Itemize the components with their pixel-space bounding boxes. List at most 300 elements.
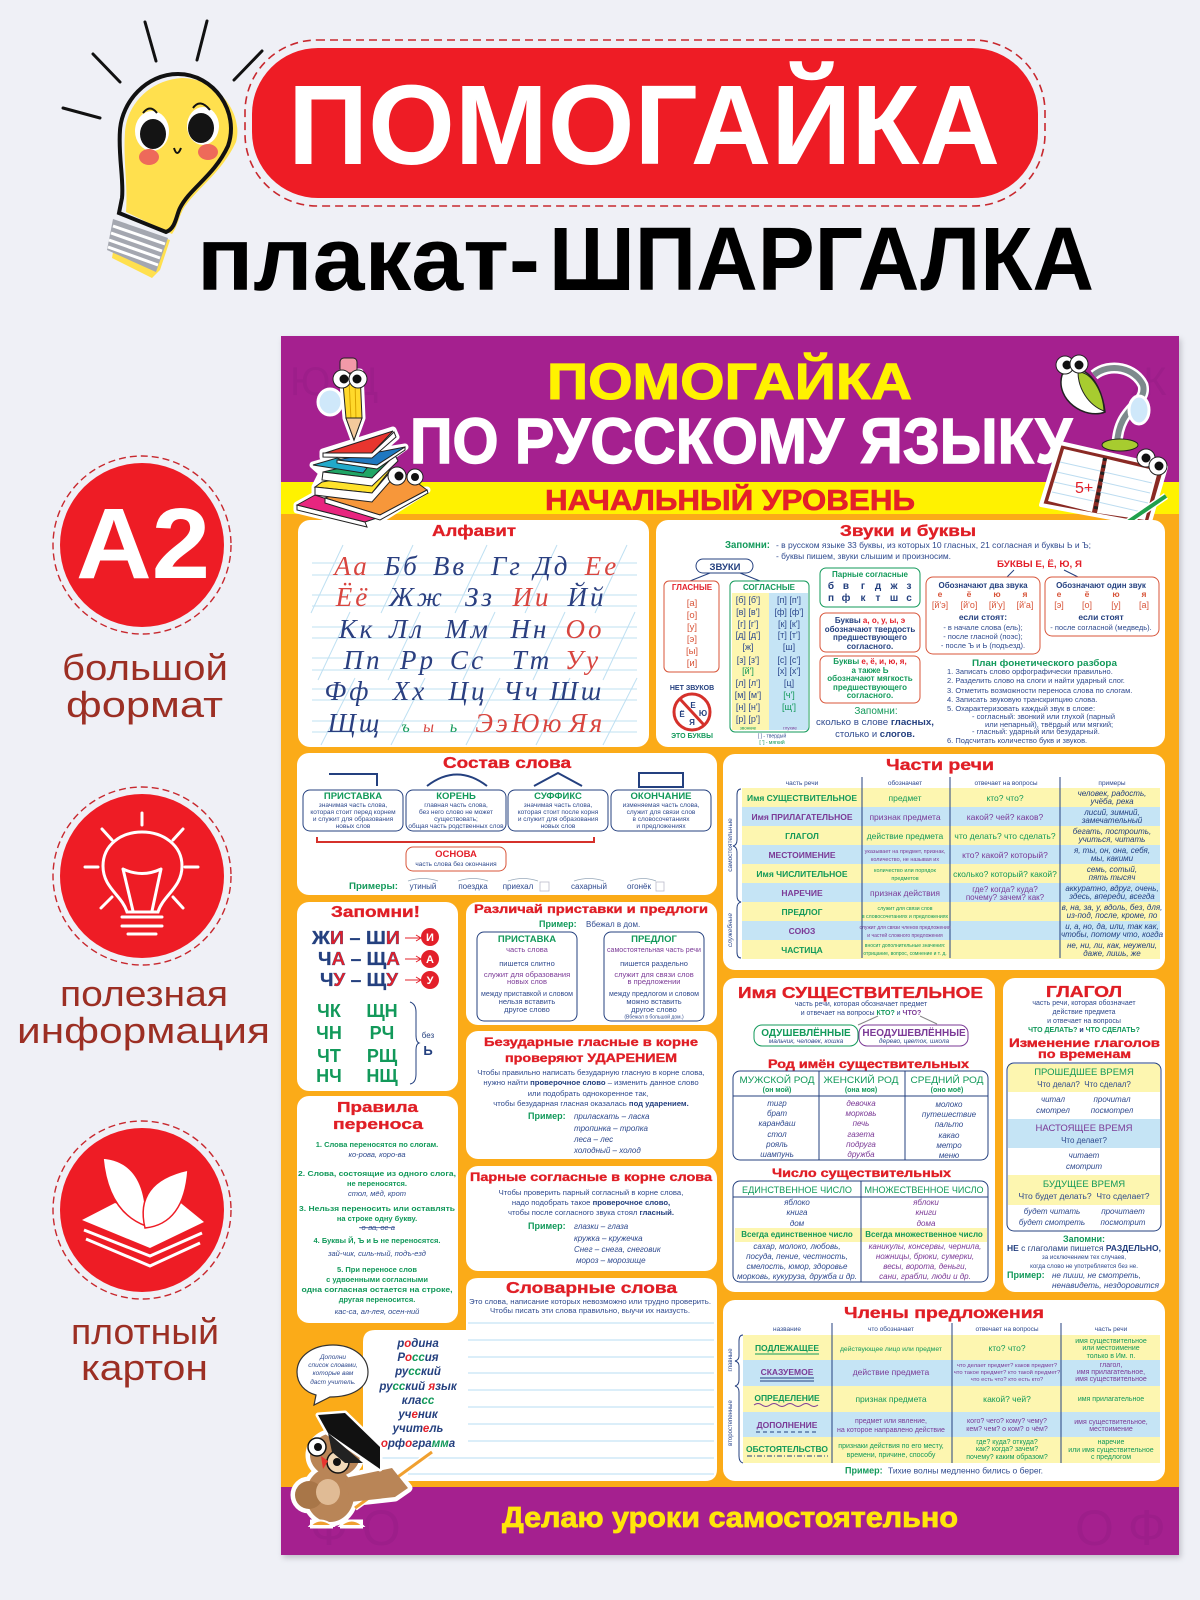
member parts of speech: имя прилагательное	[1078, 1396, 1144, 1403]
panel: verb: ГЛАГОЛ	[1046, 984, 1122, 1001]
illustration: owl with speech bubble	[295, 1345, 432, 1526]
member questions: что есть что? кто есть кто?	[971, 1377, 1044, 1383]
letter pairs without soft sign: ЧК	[317, 1001, 342, 1021]
tenses table: Что будет делать? Что сделает?	[1018, 1192, 1150, 1201]
panel: hyphenation rules: 1. Слова переносятся по слогам.	[316, 1140, 438, 1149]
member questions: кого? чего? кому? чему?	[967, 1418, 1047, 1425]
sound tree: глухие	[783, 726, 797, 730]
examples: утиный	[410, 882, 436, 891]
gender table: ЖЕНСКИЙ РОД	[824, 1074, 899, 1086]
sound tree: звонкие	[740, 726, 757, 730]
green book	[323, 455, 395, 478]
phonetic analysis plan: или непарный), твёрдый или мягкий;	[985, 720, 1113, 729]
animate and inanimate: НЕОДУШЕВЛЁННЫЕ	[862, 1026, 966, 1039]
gender table: морковь	[846, 1109, 876, 1118]
gender table: тигр	[767, 1099, 787, 1108]
number table	[733, 1181, 988, 1282]
panel: sentence members: часть речи	[1095, 1326, 1128, 1333]
member names: ОПРЕДЕЛЕНИЕ	[754, 1393, 820, 1403]
letters е ё ю я: если стоят:	[959, 612, 1007, 622]
examples: Примеры:	[349, 881, 398, 892]
panel: hyphenation rules: с удвоенными согласными	[326, 1275, 428, 1284]
letters е ё ю я: - после согласной (медведь).	[1050, 623, 1152, 632]
questions: какой? чей? каков?	[967, 812, 1043, 822]
panel: unstressed vowels: чтобы безударная гласная оказалась под ударением.	[493, 1099, 689, 1108]
panel: sentence members: Члены предложения	[844, 1305, 1044, 1322]
hard and soft rules: обозначают твердость	[825, 625, 915, 634]
panel: alphabet: Дд	[531, 551, 570, 581]
side labels	[726, 789, 741, 958]
meanings: признак действия	[870, 888, 940, 898]
number table: дом	[790, 1219, 805, 1228]
part of speech names: МЕСТОИМЕНИЕ	[768, 850, 836, 860]
phonetic analysis plan: 3. Отметить возможности переноса слова по слогам.	[947, 686, 1132, 695]
word list: Россия	[397, 1352, 439, 1364]
panel: hyphenation rules	[297, 1096, 458, 1323]
paired consonants: т	[876, 593, 881, 604]
panel: unstressed vowels: леса – лес	[573, 1135, 613, 1144]
sound tree: [в] [в']	[736, 607, 760, 617]
number table: ножницы, брюки, сумерки,	[876, 1252, 974, 1261]
letters е ё ю я: [э]	[1054, 600, 1064, 610]
letters е ё ю я: - после Ъ и Ь (подъезд).	[941, 641, 1025, 650]
examples: я, ты, он, она, себя,	[1073, 846, 1150, 855]
meanings: служит для связи членов предложения	[859, 925, 951, 931]
panel: alphabet: Сс	[450, 645, 486, 675]
meanings: указывает на предмет, признак,	[865, 849, 946, 855]
member parts of speech: имя прилагательное,	[1077, 1369, 1145, 1376]
examples: семь, сотый,	[1087, 865, 1137, 874]
gender table: путешествие	[922, 1110, 977, 1119]
examples: здесь, впереди, всегда	[1068, 892, 1155, 901]
sound tree: [и]	[687, 658, 697, 669]
member questions: как? когда? зачем?	[976, 1446, 1038, 1453]
badge: A2 большой формат	[53, 456, 231, 725]
tenses table: будет смотреть	[1019, 1218, 1085, 1227]
panel: verb	[1003, 978, 1165, 1292]
tenses table: ПРОШЕДШЕЕ ВРЕМЯ	[1034, 1067, 1134, 1078]
hard and soft rules: предшествующего	[833, 633, 907, 642]
gender table: рояль	[765, 1140, 788, 1149]
member questions: что делает предмет? каков предмет?	[957, 1363, 1058, 1369]
panel: alphabet: Оо	[566, 614, 604, 644]
letters е ё ю я: [й'а]	[1017, 600, 1033, 610]
zhi-shi rules	[311, 928, 439, 990]
panel: word structure: общая часть родственных слов	[408, 822, 504, 830]
illustration: pencil on book stack	[297, 358, 428, 527]
panel: alphabet: Ээ	[475, 708, 511, 738]
examples: не, ни, ли, как, неужели,	[1067, 941, 1157, 950]
panel: alphabet: Алфавит	[432, 523, 516, 540]
badge: A2 большой формат: A2	[76, 488, 210, 600]
letters е ё ю я: [у]	[1111, 600, 1121, 610]
panel: paired consonants in root	[466, 1166, 717, 1271]
panel: noun: Имя СУЩЕСТВИТЕЛЬНОЕ	[738, 985, 983, 1002]
phonetic analysis plan: 4. Записать звуковую транскрипцию слова.	[947, 695, 1097, 704]
panel: verb: по временам	[1038, 1049, 1131, 1061]
examples: замечательный	[1081, 816, 1143, 825]
poster title: ПОМОГАЙКА	[547, 352, 912, 410]
tenses table: читает	[1069, 1151, 1100, 1160]
member names: ДОПОЛНЕНИЕ	[757, 1420, 818, 1430]
panel: word structure: без него слово не может	[419, 808, 493, 816]
panel: sounds and letters: - в русском языке 33 буквы, из которых 10 гласных, 21 согласная и буквы Ь и Ъ;	[776, 541, 1091, 550]
subtitle: плакат-ШПАРГАЛКА: плакат-	[197, 210, 540, 310]
badge: плотный картон: плотный	[71, 1311, 219, 1352]
hard and soft rules: согласного.	[847, 642, 893, 651]
panel: word structure: новых слов	[541, 823, 576, 830]
subtitle: плакат-ШПАРГАЛКА	[197, 210, 1094, 310]
verb note: ненавидеть, нездоровится	[1052, 1281, 1160, 1290]
sticker outline	[295, 1433, 408, 1524]
panel: prefixes and prepositions: другое слово	[504, 1005, 550, 1014]
panel: word structure: существовать;	[434, 816, 478, 823]
panel: hyphenation rules: 5. При переносе слов	[337, 1265, 417, 1274]
part of speech names: Имя ЧИСЛИТЕЛЬНОЕ	[756, 869, 848, 879]
panel: hyphenation rules: зай-чик, силь-ный, подъ-езд	[327, 1249, 426, 1258]
examples: поездка	[458, 882, 488, 891]
word list	[378, 1338, 458, 1450]
tenses table: Что делал? Что сделал?	[1037, 1080, 1131, 1089]
panel: word structure: ПРИСТАВКА	[324, 791, 382, 802]
zhi-shi rules: ЧА – ЩА	[318, 949, 400, 969]
sound tree: [ ] - твердый	[758, 732, 786, 740]
member parts of speech: или местоимение	[1082, 1345, 1140, 1352]
member meanings: на которое направлено действие	[837, 1426, 945, 1434]
letters е ё ю я: Обозначают один звук	[1056, 581, 1147, 590]
sound tree: [р] [р']	[736, 714, 760, 724]
letters е ё ю я: [й'о]	[961, 600, 977, 610]
panel: dictionary words: Словарные слова	[506, 1280, 677, 1297]
side labels: служебные	[726, 913, 734, 947]
poster title	[410, 352, 1073, 517]
gender table: СРЕДНИЙ РОД	[910, 1074, 984, 1086]
panel: dictionary words: Чтобы писать эти слова правильно, выучи их наизусть.	[490, 1306, 690, 1315]
tenses table: НАСТОЯЩЕЕ ВРЕМЯ	[1036, 1123, 1133, 1134]
no-sound sign: Е	[690, 701, 696, 710]
number table: ЕДИНСТВЕННОЕ ЧИСЛО	[742, 1185, 852, 1195]
side labels: самостоятельные	[727, 818, 734, 872]
meanings: признак предмета	[869, 812, 941, 822]
member meanings: признаки действия по его месту,	[838, 1442, 944, 1450]
panel: verb: ЧТО ДЕЛАТЬ? и ЧТО СДЕЛАТЬ?	[1028, 1027, 1140, 1034]
letters е ё ю я: я	[1142, 589, 1147, 599]
title pill: ПОМОГАЙКА	[245, 40, 1045, 206]
gender table: карандаш	[758, 1119, 796, 1128]
illustration: owl with speech bubble: даст учитель.	[310, 1378, 356, 1386]
number table: каникулы, консервы, чернила,	[869, 1242, 981, 1251]
pink book	[297, 505, 367, 527]
letter pairs without soft sign: без	[422, 1031, 435, 1040]
panel: prefixes and prepositions: пишется раздельно	[620, 959, 688, 968]
subtitle: плакат-ШПАРГАЛКА: ШПАРГАЛКА	[549, 210, 1094, 310]
sound tree: ЗВУКИ	[710, 562, 741, 573]
panel: prefixes and prepositions: между приставкой и словом	[481, 989, 573, 998]
panel: word structure: СУФФИКС	[534, 791, 582, 802]
member parts of speech	[1068, 1338, 1154, 1461]
panel: sounds and letters	[656, 520, 1165, 747]
gender table: газета	[847, 1130, 875, 1139]
badge: плотный картон	[53, 1121, 231, 1388]
sound tree: [а]	[687, 598, 697, 609]
side labels	[728, 1335, 743, 1463]
meanings: количество или порядок	[874, 868, 937, 874]
panel: noun: Род имён существительных	[768, 1057, 969, 1071]
panel: alphabet: Зз	[465, 582, 495, 612]
panel: alphabet: Лл	[388, 614, 425, 644]
number table: МНОЖЕСТВЕННОЕ ЧИСЛО	[864, 1185, 984, 1195]
panel: hyphenation rules: 4. Буквы Й, Ъ и Ь не переносятся.	[314, 1236, 440, 1245]
examples: чтобы, потому что, когда	[1061, 930, 1164, 939]
panel: parts of speech: часть речи	[786, 780, 819, 787]
examples: аккуратно, вдруг, очень,	[1065, 884, 1159, 893]
badge: плотный картон: картон	[81, 1347, 208, 1388]
letters е ё ю я: [й'у]	[989, 600, 1005, 610]
verb note	[1007, 1234, 1161, 1290]
panel: word structure: часть слова без окончания	[415, 860, 497, 868]
hard and soft rules	[816, 613, 934, 740]
examples: из-под, после, кроме, по	[1067, 911, 1158, 920]
letters е ё ю я: е	[1057, 589, 1062, 599]
poster background: Ж	[1130, 360, 1167, 404]
gender table	[733, 1071, 988, 1160]
panel: prefixes and prepositions: ПРЕДЛОГ	[631, 934, 677, 945]
gender table: (оно моё)	[931, 1087, 963, 1094]
letters е ё ю я: ю	[1112, 589, 1120, 599]
questions: почему? зачем? как?	[966, 893, 1045, 902]
panel: sounds and letters: - буквы пишем, звуки слышим и произносим.	[776, 552, 951, 561]
zhi-shi rules: У	[427, 975, 434, 987]
no-sound sign: Ё	[679, 710, 685, 719]
tenses table: прочитает	[1101, 1207, 1145, 1216]
sound tree: [о]	[687, 610, 697, 621]
panel: parts of speech: примеры	[1098, 780, 1126, 787]
letters е ё ю я: если стоят	[1078, 612, 1124, 622]
sound tree: [к] [к']	[778, 619, 800, 629]
member names: ОБСТОЯТЕЛЬСТВО	[746, 1444, 828, 1454]
sound tree: ГЛАСНЫЕ	[672, 583, 713, 592]
panel: paired consonants in root: надо подобрать такое проверочное слово,	[512, 1198, 670, 1207]
panel: alphabet: Шш	[549, 676, 604, 706]
illustration: owl with speech bubble: список словами,	[308, 1362, 358, 1369]
panel: word structure: которая стоит перед корнем	[310, 809, 396, 816]
panel: noun: часть речи, которая обозначает предмет	[795, 1000, 928, 1008]
gender table: МУЖСКОЙ РОД	[740, 1074, 815, 1086]
panel: unstressed vowels: Чтобы правильно написать безударную гласную в корне слова,	[477, 1068, 705, 1077]
member parts of speech: с предлогом	[1091, 1454, 1131, 1461]
panel: hyphenation rules: 3. Нельзя переносить или оставлять	[299, 1204, 455, 1213]
number table: книга	[787, 1208, 808, 1217]
panel: word structure: в словосочетаниях	[632, 816, 690, 823]
illustration: lamp and notebook	[1041, 355, 1167, 526]
zhi-shi rules: И	[426, 932, 434, 944]
panel: prefixes and prepositions: пишется слитно	[499, 959, 555, 968]
panel: alphabet: Уу	[565, 645, 601, 675]
panel: prefixes and prepositions: в предложении	[628, 977, 680, 986]
gender table: пальто	[935, 1120, 964, 1129]
panel: hyphenation rules: кас-са, ал-лея, осен-ний	[335, 1307, 420, 1316]
word list: русский язык	[378, 1381, 458, 1393]
panel: alphabet: ь	[450, 719, 460, 736]
panel: prefixes and prepositions	[466, 902, 717, 1025]
gender table: меню	[939, 1151, 959, 1160]
paired consonants: к	[860, 593, 866, 604]
sound tree: [л] [л']	[736, 678, 760, 688]
sound tree: [ '] - мягкий	[759, 739, 785, 746]
panel: unstressed vowels: или подобрать однокоренное так,	[528, 1089, 648, 1098]
letters е ё ю я: е	[938, 589, 943, 599]
panel: word structure: Состав слова	[443, 755, 571, 772]
panel: alphabet: Фф	[325, 676, 371, 706]
panel: unstressed vowels	[466, 1031, 717, 1159]
sound tree: [с] [с']	[777, 655, 801, 665]
meanings: отрицание, вопрос, сомнение и т. д.	[863, 951, 947, 957]
tenses table: будет читать	[1024, 1207, 1080, 1216]
panel: word structure: которая стоит после корня	[518, 809, 599, 816]
phonetic analysis plan: - гласный: ударный или безударный.	[972, 727, 1100, 736]
number table: яблоки	[912, 1198, 939, 1207]
hard and soft rules: а также Ь	[851, 666, 889, 675]
panel: alphabet: Ии	[512, 582, 552, 612]
no-sound sign: НЕТ ЗВУКОВ	[670, 685, 714, 692]
questions: где? когда? куда?	[972, 885, 1038, 894]
phonetic analysis plan: - согласный: звонкий или глухой (парный	[972, 712, 1115, 721]
member questions: что такое предмет? кто такой предмет?	[954, 1369, 1061, 1376]
icon: smiling light bulb	[63, 21, 262, 278]
panel: noun	[723, 978, 995, 1292]
meanings: служит для связи слов	[878, 906, 933, 912]
phonetic analysis plan: 6. Подсчитать количество букв и звуков.	[947, 736, 1087, 745]
blue books	[313, 458, 367, 473]
member meanings	[837, 1345, 945, 1459]
questions: сколько? который? какой?	[953, 869, 1057, 879]
panel: verb: часть речи, которая обозначает	[1032, 999, 1136, 1007]
panel: alphabet: Цц	[448, 676, 488, 706]
animate and inanimate	[754, 1025, 968, 1046]
letters е ё ю я: ю	[993, 589, 1001, 599]
tenses table: прочитал	[1094, 1095, 1131, 1104]
examples: приехал	[503, 882, 534, 891]
examples: и, а, но, да, или, так как,	[1065, 922, 1159, 931]
red book	[325, 431, 393, 453]
sound tree: [н] [н']	[736, 702, 760, 712]
poster background: О Ф	[1075, 1500, 1166, 1556]
letters е ё ю я: [о]	[1082, 600, 1092, 610]
meanings: действие предмета	[867, 831, 944, 841]
panel: alphabet	[298, 520, 649, 747]
panel: verb: и отвечает на вопросы	[1047, 1018, 1121, 1025]
sound tree	[664, 559, 809, 746]
letters е ё ю я: ё	[1085, 589, 1090, 599]
gender table: метро	[936, 1141, 962, 1150]
panel: prefixes and prepositions: Вбежал в дом.	[586, 920, 640, 929]
panel: prefixes and prepositions: нельзя вставить	[499, 997, 555, 1006]
letters е ё ю я: - после гласной (поэс);	[943, 632, 1023, 641]
panel: alphabet: ы	[423, 719, 437, 736]
orange book	[325, 470, 427, 515]
poster background: Ю Щ	[290, 360, 379, 404]
sound tree: [х] [х']	[777, 666, 801, 676]
tenses table: смотрел	[1036, 1106, 1070, 1115]
meanings: предметов	[891, 876, 919, 882]
panel: word structure: новых слов	[336, 823, 371, 830]
panel: paired consonants in root: кружка – кружечка	[574, 1234, 643, 1243]
panel: unstressed vowels: холодный – холод	[573, 1146, 641, 1155]
sound tree: [г] [г']	[738, 619, 758, 629]
hard and soft rules: Буквы е, ё, и, ю, я,	[833, 657, 907, 666]
panel: remember	[297, 902, 458, 1091]
side labels: главные	[728, 1348, 734, 1372]
sound tree: [б] [б']	[736, 595, 760, 605]
sound tree: [ш]	[783, 642, 795, 652]
verb note: Пример:	[1007, 1270, 1045, 1280]
panel: word structure: изменяемая часть слова,	[623, 802, 700, 809]
gender table: брат	[767, 1109, 787, 1118]
panel: unstressed vowels: нужно найти проверочное слово – изменить данное слово	[483, 1078, 699, 1087]
member names	[746, 1343, 828, 1456]
sound tree: [ы]	[686, 646, 698, 657]
no-sound sign: Ю	[699, 709, 707, 718]
examples: сахарный	[571, 882, 607, 891]
panel: alphabet: Пп	[342, 645, 382, 675]
panel: paired consonants in root: глазки – глаза	[574, 1222, 629, 1231]
examples: в, на, за, у, вдоль, без, для,	[1062, 903, 1162, 912]
sound tree: [п] [п']	[777, 595, 801, 605]
badge: полезная информация: информация	[17, 1010, 270, 1051]
gender table: шампунь	[760, 1150, 794, 1159]
number table: яблоко	[783, 1198, 810, 1207]
panel: prefixes and prepositions: ПРИСТАВКА	[498, 934, 556, 945]
panel: hyphenation rules: ко-рова, коро-ва	[348, 1150, 406, 1159]
examples: огонёк	[627, 882, 652, 891]
member names: ПОДЛЕЖАЩЕЕ	[755, 1343, 819, 1353]
panel: paired consonants in root: Парные согласные в корне слова	[470, 1170, 712, 1184]
phonetic analysis plan	[947, 658, 1132, 745]
hard and soft rules: Буквы а, о, у, ы, э	[835, 616, 906, 625]
panel: verb: Изменение глаголов	[1009, 1038, 1160, 1050]
paired consonants: б	[828, 580, 834, 592]
panel: word structure: ОСНОВА	[435, 849, 477, 860]
paired consonants: п	[828, 593, 834, 604]
letter pairs without soft sign: ЧТ	[317, 1046, 341, 1066]
panel: alphabet: Тт	[512, 645, 552, 675]
panel: alphabet: Кк	[338, 614, 375, 644]
examples: даже, лишь, же	[1083, 949, 1141, 958]
questions: кто? какой? который?	[962, 850, 1048, 860]
panel: hyphenation rules: другая переносится.	[339, 1295, 415, 1304]
letter pairs without soft sign: Ь	[423, 1043, 433, 1058]
panel: hyphenation rules: переноса	[333, 1116, 424, 1133]
zhi-shi rules: А	[426, 954, 434, 966]
word list: орфограмма	[381, 1438, 456, 1450]
letters е ё ю я: - в начале слова (ель);	[943, 623, 1023, 632]
poster background: Ф О	[310, 1500, 401, 1556]
panel: prefixes and prepositions: другое слово	[631, 1005, 677, 1014]
gender table: девочка	[846, 1099, 876, 1108]
no-sound sign: Я	[689, 718, 695, 727]
part of speech names: НАРЕЧИЕ	[781, 888, 823, 898]
gender table: дружба	[847, 1150, 875, 1159]
illustration: lamp and notebook: 5+	[1075, 480, 1093, 497]
no-sound sign: ЭТО БУКВЫ	[671, 733, 713, 740]
member questions: кем? чем? о ком? о чём?	[966, 1426, 1048, 1433]
animate and inanimate: ОДУШЕВЛЁННЫЕ	[761, 1026, 851, 1039]
paired consonants: д	[875, 581, 882, 592]
examples	[349, 878, 664, 892]
meanings: предмет	[888, 793, 922, 803]
panel: word structure: главная часть слова,	[424, 802, 488, 809]
examples: бегать, построить,	[1073, 827, 1151, 836]
